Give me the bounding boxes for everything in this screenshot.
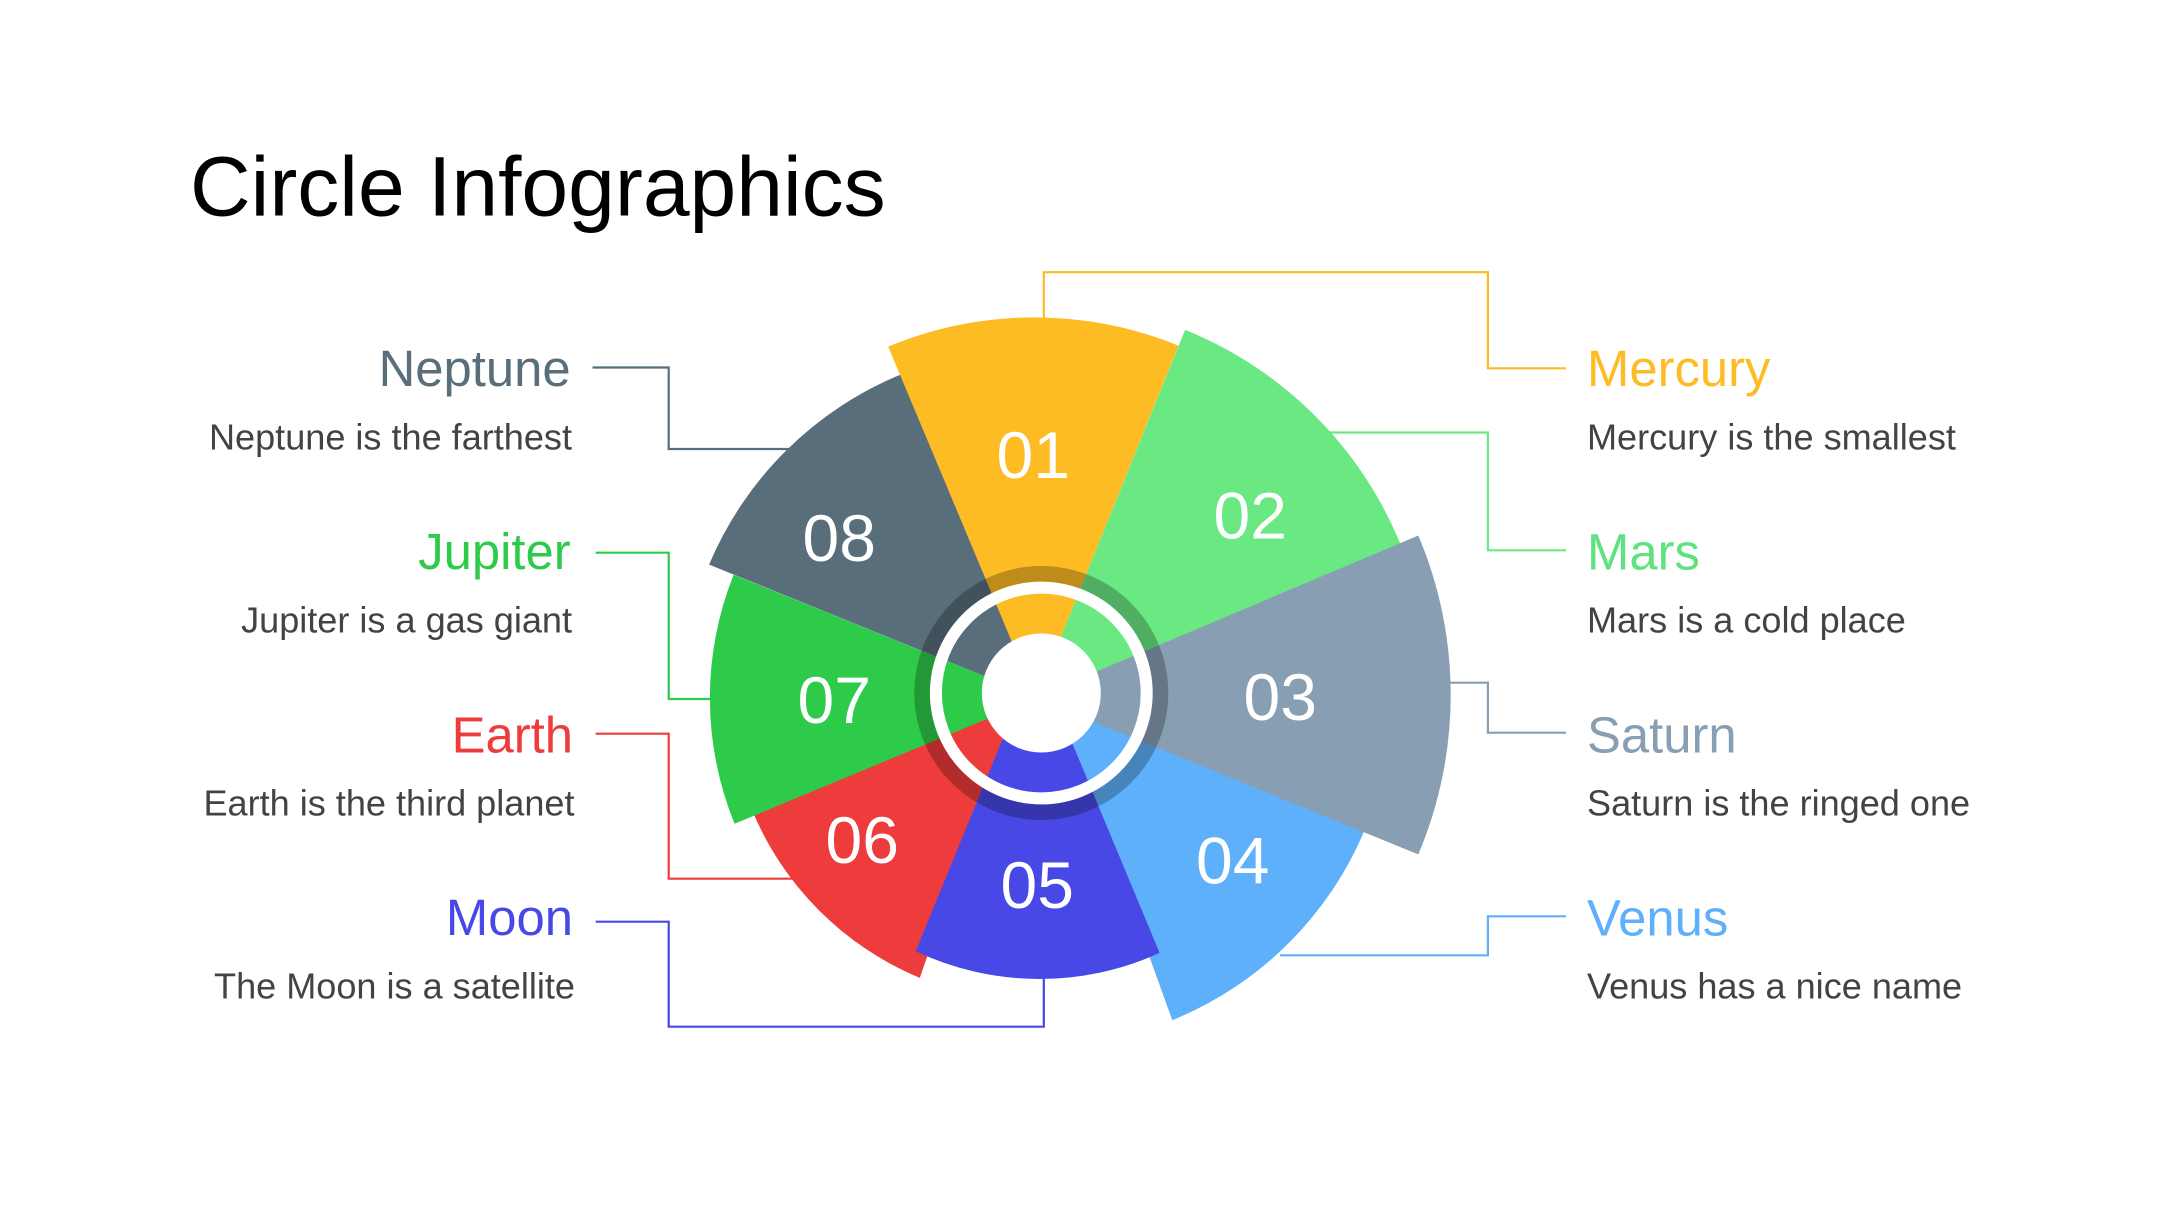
- label: Moon: The Moon is a satellite: [214, 966, 575, 1007]
- label: Moon: Moon: [446, 889, 573, 946]
- label: Earth: [203, 706, 574, 823]
- segment 05: [916, 693, 1160, 979]
- segment 06: [752, 693, 1041, 978]
- segment 01: [888, 317, 1178, 693]
- segment 04: [1041, 693, 1366, 1020]
- label: Mars: Mars: [1587, 523, 1700, 580]
- segment 02: [1041, 330, 1410, 693]
- connector: Neptune: [592, 368, 790, 449]
- number 01: 01: [996, 418, 1070, 492]
- number 02: 02: [1214, 479, 1287, 553]
- segment 03: [1041, 536, 1451, 854]
- circular wheel chart: [709, 317, 1451, 1020]
- connector: Saturn: [1445, 683, 1566, 733]
- label: Neptune: [209, 340, 572, 458]
- number 06: 06: [826, 803, 899, 877]
- number 04: 04: [1196, 824, 1269, 898]
- label: Neptune: Neptune is the farthest: [209, 416, 572, 458]
- label: Saturn: [1587, 707, 1970, 823]
- label: Earth: Earth: [452, 706, 573, 763]
- connector: Moon: [596, 922, 1044, 1027]
- white ring: [936, 588, 1147, 798]
- connector: Venus: [1280, 916, 1566, 955]
- number 07: 07: [798, 663, 871, 737]
- label: Mars: Mars is a cold place: [1587, 600, 1906, 641]
- label: Jupiter: Jupiter: [418, 523, 571, 580]
- label: Venus: [1587, 889, 1962, 1007]
- label: Mars: [1587, 523, 1906, 641]
- number 03: 03: [1244, 660, 1317, 734]
- connector: Jupiter: [596, 553, 712, 699]
- label: Jupiter: [241, 523, 572, 641]
- connector: Mercury: [1044, 272, 1566, 368]
- label: Saturn: Saturn: [1587, 707, 1737, 764]
- label: Mercury: [1587, 340, 1956, 458]
- number 05: 05: [1000, 848, 1074, 922]
- connector: Earth: [596, 734, 795, 879]
- title: Circle Infographics: [190, 140, 886, 234]
- label: Mercury: Mercury: [1587, 340, 1771, 397]
- number 08: 08: [802, 501, 876, 575]
- label: Earth: Earth is the third planet: [203, 782, 574, 823]
- label: Venus: Venus has a nice name: [1587, 966, 1962, 1007]
- segment 07: [710, 575, 1041, 824]
- label: Neptune: Neptune: [379, 340, 571, 397]
- white centre circle: [982, 634, 1101, 752]
- label: Mercury: Mercury is the smallest: [1587, 416, 1956, 458]
- label: Saturn: Saturn is the ringed one: [1587, 782, 1970, 823]
- segment 08: [709, 374, 1041, 693]
- label: Moon: [214, 889, 575, 1007]
- connector: Mars: [1330, 432, 1566, 550]
- label: Jupiter: Jupiter is a gas giant: [241, 600, 572, 641]
- dark translucent ring: [922, 574, 1160, 812]
- label: Venus: Venus: [1587, 889, 1728, 946]
